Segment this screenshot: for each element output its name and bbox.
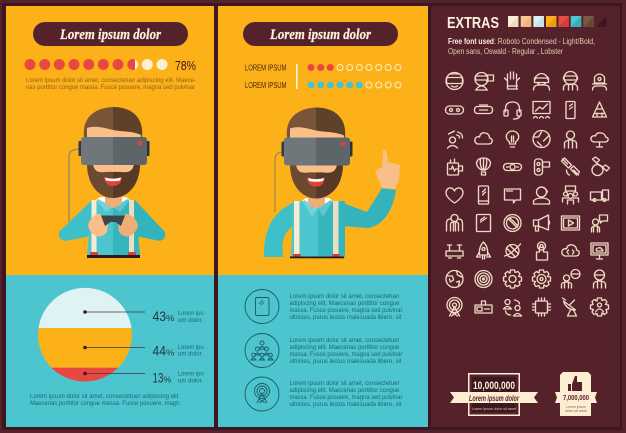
pie label 13 percent: Lorem ips-	[178, 370, 205, 378]
pie label 13 percent: %	[164, 376, 172, 384]
icon: goggles front	[446, 106, 464, 114]
icon: concentric target	[475, 270, 492, 288]
feature 2: people pyramid icon and text	[245, 334, 403, 368]
badge: 7,000,000 with thumbs up: Lorem ipsum	[566, 405, 586, 409]
icon: router	[446, 245, 463, 258]
badge: 10,000,000	[450, 373, 538, 416]
pie caption: Maecenas porttitor congue massa. Fusce posuere, magn.	[30, 400, 181, 407]
icon: satellite	[562, 158, 580, 175]
feature 1: tablet icon and text: massa. Fusce posuere, magna sed pulvinar	[290, 307, 403, 314]
icon: radio tower	[447, 298, 462, 316]
font credits: Free font used	[448, 37, 494, 46]
feature 1: tablet icon and text: adipiscing elit. Maecenas porttitor congue	[290, 300, 400, 307]
pie chart	[38, 288, 132, 381]
intro text: nas porttitor congue massa. Fusce posuere, magna sed pulvinar	[26, 84, 196, 91]
icon: person with globe head	[594, 270, 606, 288]
icon: presentation chart	[533, 102, 550, 118]
pie label 43 percent: %	[166, 314, 174, 323]
dot rating rows	[245, 62, 401, 90]
feature 3: radio tower icon and text: massa. Fusce posuere, magna sed pulvinar	[290, 394, 403, 401]
icon: monitor with cloud	[591, 243, 608, 259]
icon: cloud	[475, 133, 492, 144]
icon: goggles side	[474, 105, 492, 114]
icon: prohibited sign	[504, 214, 521, 232]
feature 2: people pyramid icon and text: adipiscing elit. Maecenas porttitor congue	[290, 344, 400, 351]
feature 2: people pyramid icon and text: ultricies, purus lectus malesuada libero, sit	[290, 358, 402, 365]
icon: swirling planet	[504, 244, 520, 258]
dot rating rows: LOREM IPSUM	[245, 80, 286, 90]
icon: gear with centre	[532, 270, 550, 288]
pie label 43 percent: Lorem ips-	[178, 310, 205, 317]
icon: head with headset	[475, 72, 494, 90]
badge: 10,000,000: 10,000,000	[473, 380, 515, 392]
middle heading pill: Lorem ipsum dolor	[269, 27, 371, 43]
colour swatches	[508, 16, 606, 27]
icon: person with speech bubble	[592, 215, 608, 232]
icon: truck	[590, 190, 608, 202]
badge: 7,000,000 with thumbs up: dolor sit amet	[565, 409, 587, 413]
icon: satellite over globe	[592, 157, 610, 176]
icon: hot air balloon	[476, 158, 490, 175]
icon: satellite dish	[562, 298, 576, 316]
font credits: Open sans, Oswald - Regular , Lobster	[448, 47, 563, 56]
pie label 44 percent: %	[166, 348, 174, 358]
icon: person with VR helmet	[534, 74, 550, 90]
pie label 43 percent: um dolor.	[178, 317, 203, 324]
pie label 44 percent: um dolor.	[178, 350, 203, 358]
feature 1: tablet icon and text	[245, 290, 403, 324]
dot rating 78 percent: 78%	[175, 58, 196, 73]
badge: 7,000,000 with thumbs up: 7,000,000	[563, 395, 589, 402]
icon: people pyramid	[592, 102, 606, 117]
icon: tablet	[476, 214, 490, 232]
pie label 44 percent: Lorem ips-	[178, 344, 205, 351]
icon: touch target	[536, 242, 548, 260]
icon: group with screen	[562, 186, 578, 204]
icon: heart	[446, 188, 463, 203]
icon: processor chip	[532, 298, 550, 316]
icon: earth	[446, 270, 463, 288]
head with VR headset	[78, 107, 150, 208]
middle heading pill	[243, 22, 398, 46]
icon: rocket	[476, 242, 490, 259]
pie caption: Lorem ipsum dolor sit amet, consectetuer adipiscing elit.	[30, 393, 180, 400]
dot rating 78 percent	[24, 58, 196, 73]
panel: extras	[431, 6, 620, 427]
intro text: Lorem ipsum dolor sit amet, consectetuer adipiscing elit. Maece-	[26, 77, 196, 84]
pie label 13 percent	[83, 370, 205, 386]
illustration: man with VR headset and game controller	[59, 107, 165, 258]
icon: video player	[562, 216, 580, 230]
icon: gear	[504, 270, 522, 288]
feature 1: tablet icon and text: Lorem ipsum dolor sit amet, consectetuer	[290, 293, 400, 300]
badge: 10,000,000: Lorem ipsum dolor	[469, 394, 520, 403]
font credits: : Roboto Condensed - Light/Bold,	[494, 37, 595, 46]
left heading pill: Lorem ipsum dolor	[59, 27, 161, 43]
pie caption	[30, 393, 181, 407]
icon: thumbs up	[568, 376, 582, 391]
feature 1: tablet icon and text: ultricies, purus lectus malesuada libero, sit	[290, 314, 402, 321]
head with VR headset	[282, 108, 352, 208]
icon: mug with pulse	[448, 159, 462, 175]
icon: person in dome	[592, 74, 606, 90]
icon: globe	[533, 130, 550, 148]
icon: gear with people	[590, 298, 608, 316]
feature 3: radio tower icon and text: ultricies, purus lectus malesuada libero, sit	[290, 401, 402, 408]
panel: left infographic	[6, 6, 214, 427]
icon: camera device	[534, 159, 550, 175]
icon: person with signal	[448, 131, 462, 148]
feature 3: radio tower icon and text: adipiscing elit. Maecenas porttitor congue	[290, 387, 400, 394]
dot rating rows: LOREM IPSUM	[245, 62, 286, 72]
left heading pill	[33, 22, 188, 46]
pie label 13 percent: 13	[152, 370, 164, 386]
icon: glove	[504, 72, 520, 89]
feature 2: people pyramid icon and text: massa. Fusce posuere, magna sed pulvinar	[290, 351, 403, 358]
pie label 44 percent: 44	[152, 342, 166, 358]
feature 2: people pyramid icon and text: Lorem ipsum dolor sit amet, consectetuer	[290, 337, 400, 344]
extras heading: EXTRAS	[447, 15, 499, 32]
icon: megaphone	[534, 215, 550, 231]
icon: person with globe bubble	[562, 270, 580, 288]
panel: middle infographic	[218, 6, 428, 427]
pie label 13 percent: um dolor.	[178, 378, 203, 384]
icon: device box	[475, 301, 492, 313]
font credits	[448, 37, 595, 56]
icon: phone	[566, 102, 575, 118]
feature 3: radio tower icon and text	[245, 377, 403, 411]
feature 3: radio tower icon and text: Lorem ipsum dolor sit amet, consectetuer	[290, 380, 400, 387]
pie label 43 percent: 43	[152, 308, 166, 324]
icon: headphones	[504, 102, 521, 119]
icon: cloud network	[591, 133, 608, 147]
badge: 10,000,000: Lorem ipsum dolor sit amet	[472, 407, 516, 411]
icon: person	[564, 131, 576, 148]
icon: speech bubble	[504, 189, 520, 203]
icon: smartphone	[478, 186, 488, 204]
badge: 7,000,000 with thumbs up	[555, 372, 597, 416]
icon: person with goggles	[564, 72, 578, 90]
icon: bandage goggles	[504, 164, 522, 170]
icon: person with headset circle	[534, 187, 550, 204]
icon: group of people	[446, 214, 462, 231]
icon: people exchange	[504, 300, 522, 316]
illustration: man with VR headset pointing up	[264, 108, 400, 258]
icon: light bulb	[506, 131, 519, 147]
intro text	[26, 77, 196, 91]
icon: VR face	[446, 72, 463, 90]
pie label 43 percent	[83, 308, 205, 324]
icon grid	[446, 72, 610, 316]
hand pointing up	[375, 150, 400, 189]
icon: cloud code	[562, 245, 579, 256]
pie label 44 percent	[83, 342, 205, 358]
